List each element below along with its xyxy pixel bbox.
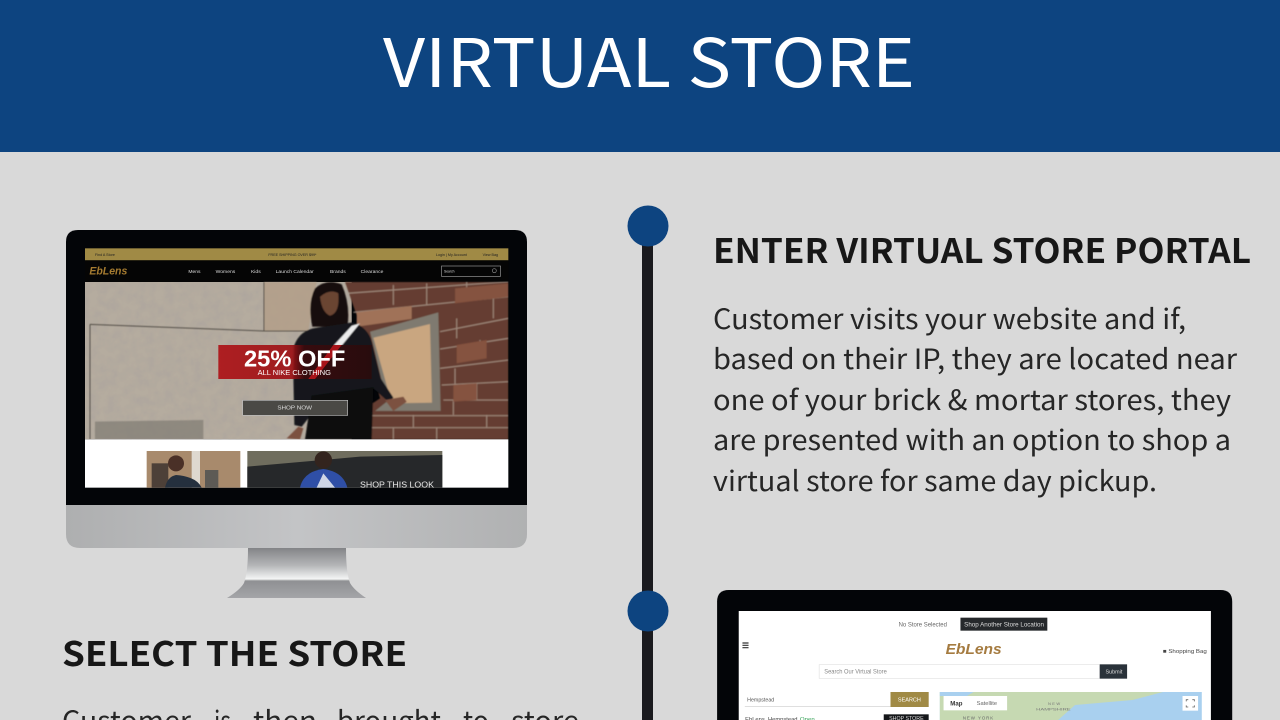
text block: enter virtual store portal: virtual store for same day pickup. <box>713 460 1157 500</box>
gold top bar: FREE SHIPPING OVER $99* <box>268 253 317 257</box>
search bar: Submit <box>1105 669 1123 675</box>
monitor stand <box>227 548 366 598</box>
map: Satellite <box>977 701 997 707</box>
gold top bar <box>85 248 508 260</box>
search bar <box>819 664 1127 679</box>
monitor bezel <box>66 230 527 505</box>
header band <box>0 0 1280 152</box>
map: HAMPSHIRE <box>1036 706 1071 711</box>
gold top bar: Login | My Account <box>436 253 467 257</box>
navigation bar: Brands <box>330 269 346 275</box>
shop another store button <box>960 618 1047 631</box>
timeline marker 1 <box>628 206 668 246</box>
gold top bar: View Bag <box>483 253 498 257</box>
map: NEW <box>1048 701 1060 706</box>
navigation bar: EbLens <box>89 265 127 277</box>
store result <box>745 714 929 720</box>
shop now button: SHOP NOW <box>277 406 313 412</box>
store status: No Store Selected <box>899 622 947 628</box>
text block: select the store <box>62 700 579 720</box>
menu icon <box>742 643 749 648</box>
navigation bar: Mens <box>188 269 201 275</box>
text block: enter virtual store portal: one of your brick & mortar stores, they <box>713 379 1231 419</box>
navigation bar: Clearance <box>361 269 384 275</box>
monitor bezel <box>717 590 1232 720</box>
hero photo <box>85 282 508 439</box>
navigation bar: Search <box>444 270 455 274</box>
text block: enter virtual store portal: are presented with an option to shop a <box>713 419 1231 459</box>
locator screen <box>739 611 1211 720</box>
text block: enter virtual store portal: Customer visits your website and if, <box>713 298 1186 338</box>
storefront screen <box>85 248 508 490</box>
sale banner: ALL NIKE CLOTHING <box>258 368 331 377</box>
search bar: Search Our Virtual Store <box>824 670 887 676</box>
sale banner: 25% OFF <box>244 346 345 372</box>
logo: EbLens <box>946 642 1002 658</box>
panel: monitor showing store locator <box>717 590 1232 720</box>
panel: monitor showing storefront <box>66 230 527 598</box>
heading: enter virtual store portal: ENTER VIRTUAL STORE PORTAL <box>713 224 1251 273</box>
navigation bar <box>85 260 508 282</box>
woman <box>310 282 348 327</box>
gold top bar: Find A Store <box>95 253 115 257</box>
map: Map <box>950 701 963 707</box>
lower page section <box>85 439 508 490</box>
heading: select the store: SELECT THE STORE <box>62 627 407 676</box>
navigation bar: Kids <box>251 269 261 275</box>
timeline <box>628 206 668 720</box>
store search field <box>745 692 929 707</box>
monitor body <box>66 505 527 548</box>
text block: enter virtual store portal: based on their IP, they are located near <box>713 338 1237 378</box>
text block: enter virtual store portal <box>713 298 1237 500</box>
navigation bar: Womens <box>216 269 236 275</box>
boarded window <box>370 312 441 411</box>
store search field: SEARCH <box>898 698 921 704</box>
shopping bag link: ■ Shopping Bag <box>1163 649 1207 655</box>
store search field: Hempstead <box>747 697 774 703</box>
shop now button <box>243 400 348 415</box>
title: VIRTUAL STORE <box>383 10 915 107</box>
navigation bar: Launch Calendar <box>276 269 314 275</box>
map <box>940 692 1202 720</box>
lower page section: SHOP THIS LOOK <box>360 480 434 490</box>
timeline marker 2 <box>628 590 668 632</box>
shop another store button: Shop Another Store Location <box>964 622 1044 628</box>
sale banner <box>218 345 372 379</box>
